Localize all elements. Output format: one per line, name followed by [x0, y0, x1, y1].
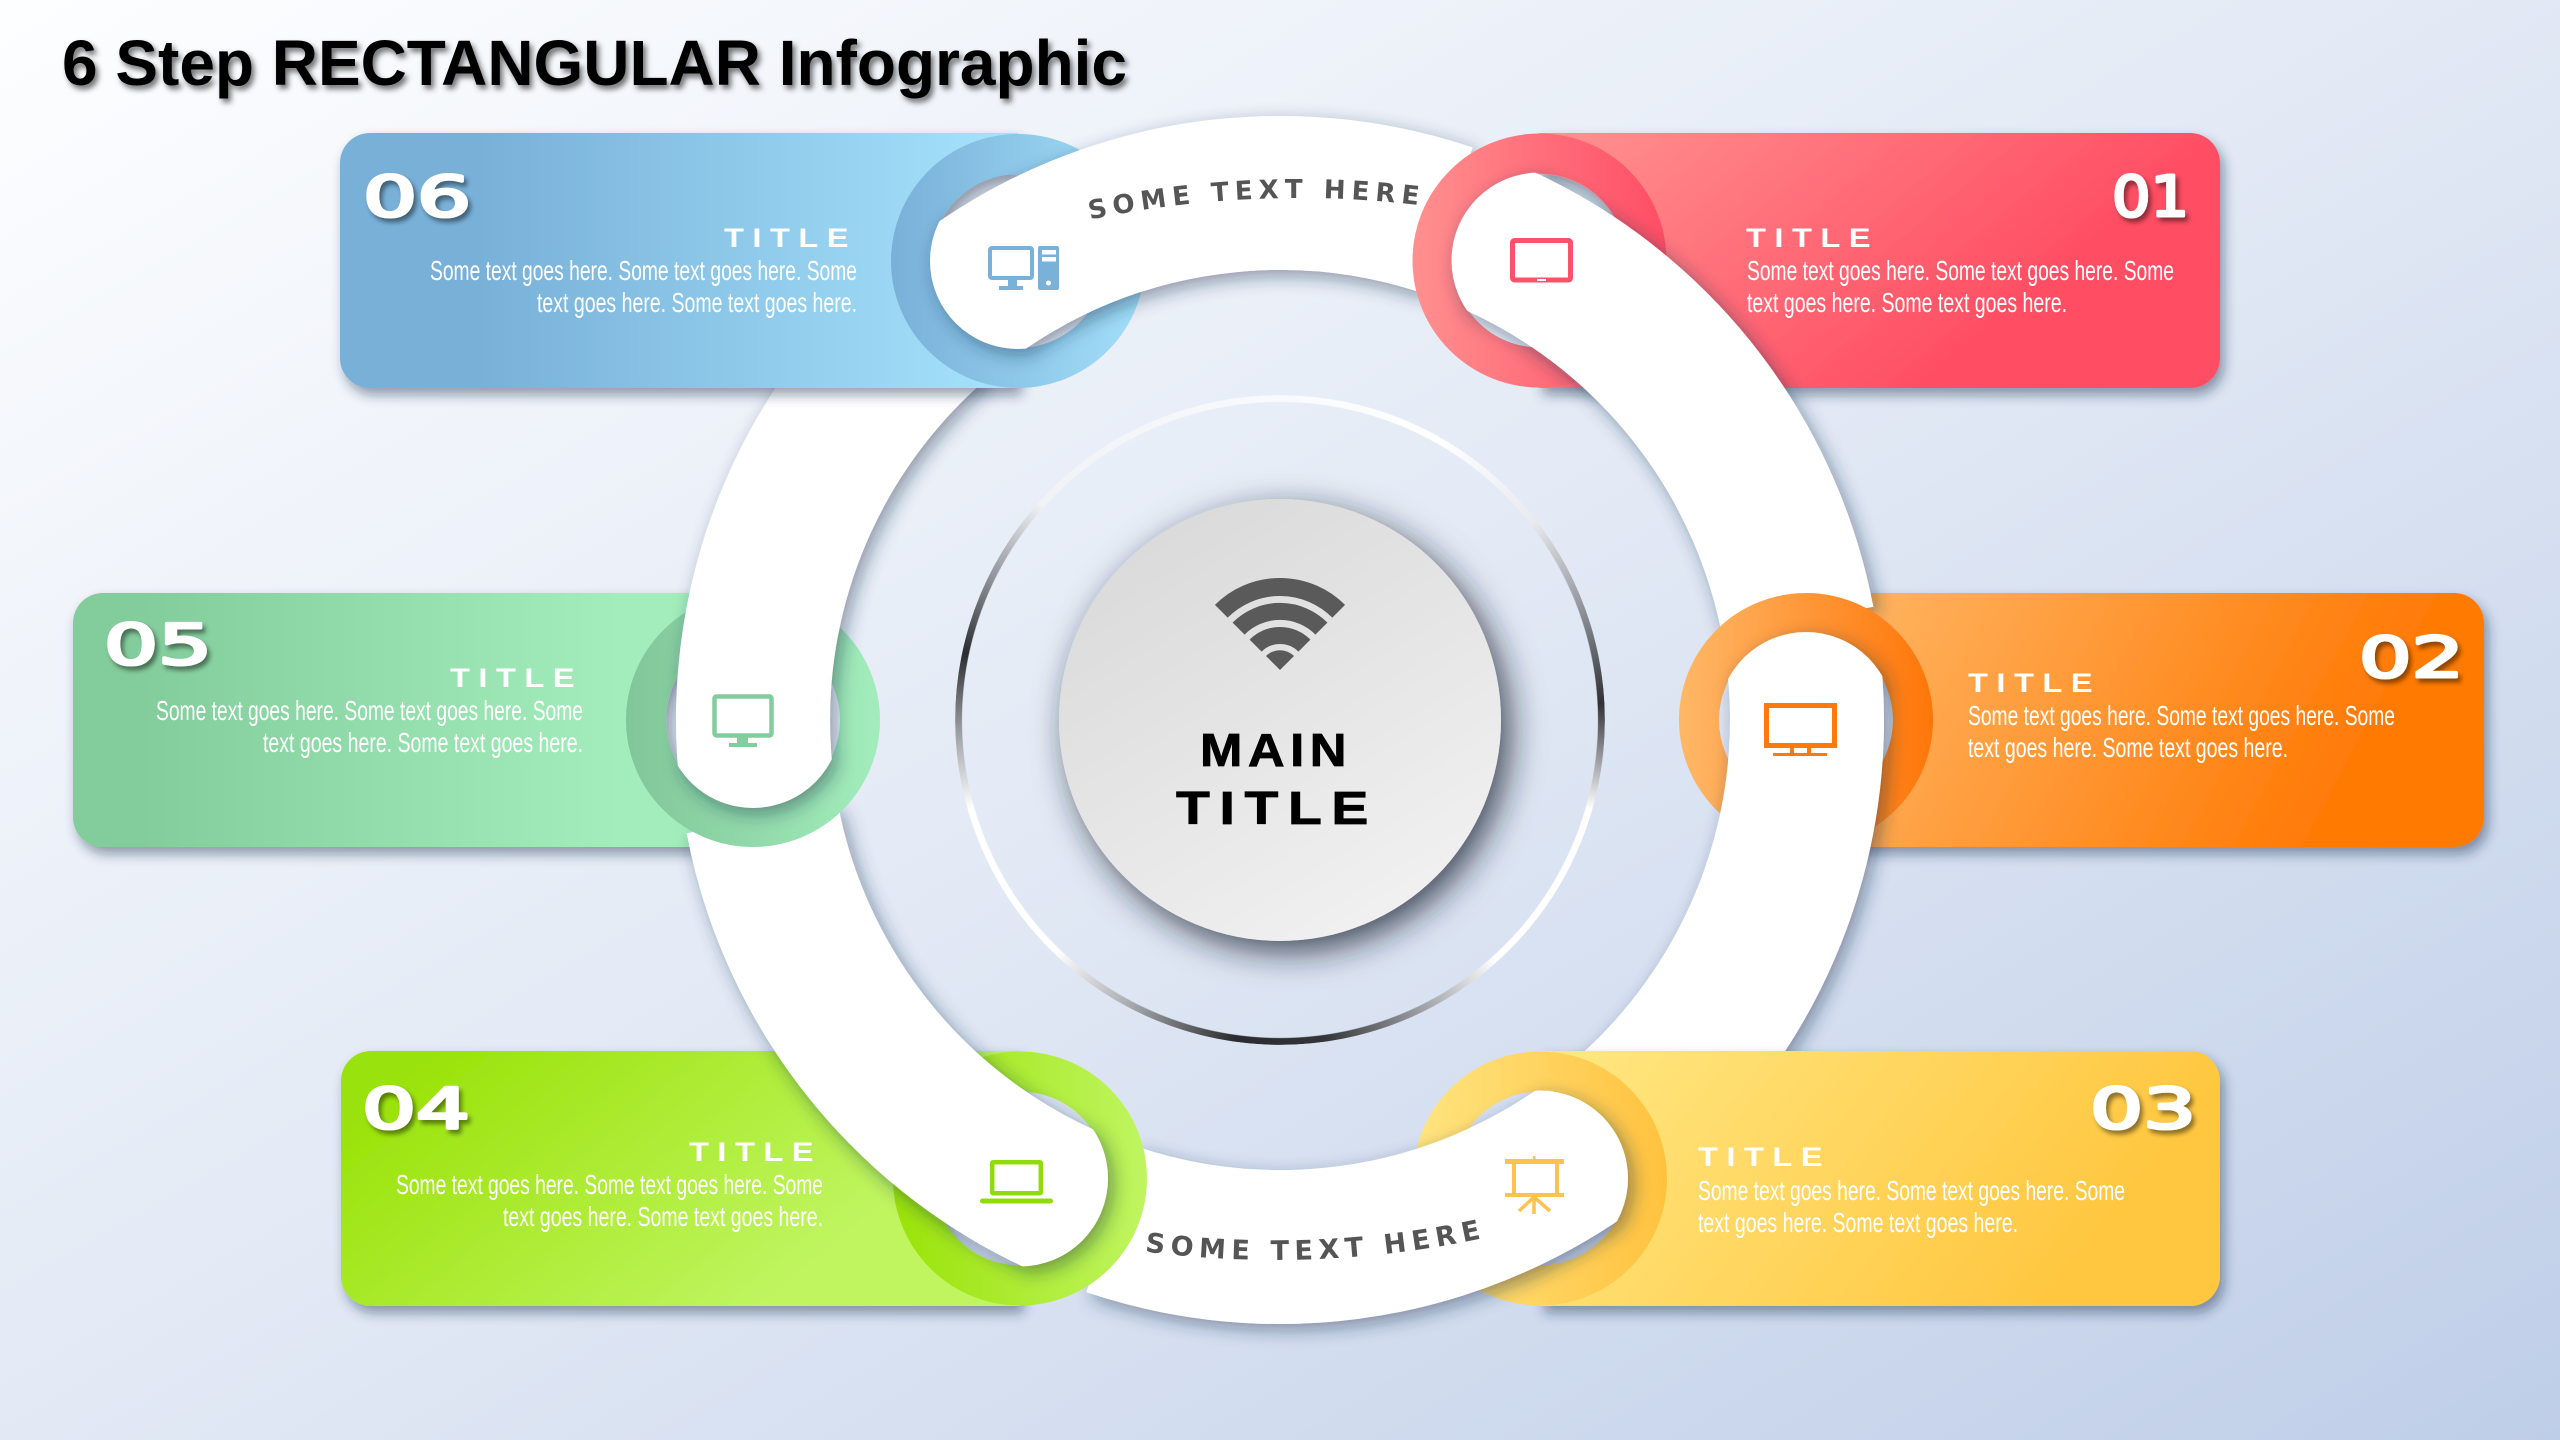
- ring 05: [646, 613, 860, 827]
- icon: tablet: [1512, 240, 1570, 281]
- heading 04: TITLE: [689, 1137, 822, 1167]
- body text 04: Some text goes here. Some text goes here. Some: [396, 1169, 823, 1200]
- band: segment 06 to 01, left part: [936, 193, 1448, 320]
- icon: laptop: [980, 1162, 1053, 1204]
- body text 05: Some text goes here. Some text goes here. Some: [156, 695, 583, 726]
- body text 03: [1698, 1175, 2125, 1238]
- number 01: 01: [2112, 165, 2189, 230]
- band: segment 02 to 03: [1622, 619, 1807, 1121]
- body text 02: [1968, 700, 2395, 763]
- number 02: 02: [2359, 626, 2464, 691]
- body text 05: text goes here. Some text goes here.: [263, 727, 583, 758]
- body text 03: Some text goes here. Some text goes here. Some: [1698, 1175, 2125, 1206]
- card shape 05: [73, 593, 753, 847]
- panel: step 04: [341, 1051, 1020, 1306]
- body text 04: [396, 1169, 823, 1232]
- ring 01: [1432, 154, 1646, 368]
- number 04: 04: [362, 1077, 470, 1142]
- card shape 01: [1539, 133, 2220, 388]
- panel: step 05: [73, 593, 753, 847]
- body text 01: text goes here. Some text goes here.: [1747, 287, 2067, 318]
- heading 02: TITLE: [1968, 668, 2101, 698]
- body text 01: [1747, 255, 2174, 318]
- card shape 03: [1540, 1051, 2220, 1306]
- curved label top: SOME TEXT HERE: [1089, 179, 1418, 218]
- title: 6 Step RECTANGULAR Infographic: [62, 27, 1127, 99]
- body text 01: Some text goes here. Some text goes here. Some: [1747, 255, 2174, 286]
- center disc: [1059, 499, 1501, 941]
- icon: desktop monitor: [714, 696, 772, 747]
- band: segment 03 to 04: [1111, 1120, 1623, 1247]
- band: segment 01 to 02: [1446, 220, 1798, 621]
- ring 02: [1699, 613, 1913, 827]
- panel: step 03: [1540, 1051, 2220, 1306]
- band: segment 04 to 05: [762, 819, 1113, 1220]
- body text 02: text goes here. Some text goes here.: [1968, 732, 2288, 763]
- heading 01: TITLE: [1746, 223, 1879, 253]
- ring 04: [913, 1072, 1127, 1286]
- panel: step 01: [1539, 133, 2220, 388]
- ring 03: [1433, 1072, 1647, 1286]
- ring 06: [911, 154, 1125, 368]
- decorative metallic thin ring: [955, 395, 1605, 1045]
- main title: TITLE: [1176, 782, 1378, 834]
- heading 06: TITLE: [724, 223, 857, 253]
- body text 04: text goes here. Some text goes here.: [503, 1201, 823, 1232]
- card shape 04: [341, 1051, 1020, 1306]
- icon: projector screen: [1505, 1156, 1564, 1214]
- number 03: 03: [2090, 1077, 2196, 1142]
- heading 05: TITLE: [450, 663, 583, 693]
- body text 03: text goes here. Some text goes here.: [1698, 1207, 2018, 1238]
- band: segment 05 to 06: [753, 319, 938, 821]
- panel: step 02: [1806, 593, 2484, 847]
- main title: MAIN: [1200, 724, 1352, 776]
- panel: step 06: [340, 133, 1018, 388]
- band: segment 06 to 01, right part: [1019, 193, 1448, 262]
- body text 06: text goes here. Some text goes here.: [537, 287, 857, 318]
- body text 06: [430, 255, 857, 318]
- main title: [1176, 724, 1378, 834]
- heading 03: TITLE: [1698, 1142, 1831, 1172]
- card shape 06: [340, 133, 1018, 388]
- number 05: 05: [104, 613, 212, 678]
- icon: widescreen monitor: [1766, 706, 1834, 756]
- curved label bottom: SOME TEXT HERE: [1147, 1220, 1480, 1260]
- icon: wifi: [1221, 587, 1339, 670]
- icon: computer and tower: [990, 246, 1059, 290]
- body text 06: Some text goes here. Some text goes here. Some: [430, 255, 857, 286]
- body text 05: [156, 695, 583, 758]
- number 06: 06: [363, 165, 471, 230]
- card shape 02: [1806, 593, 2484, 847]
